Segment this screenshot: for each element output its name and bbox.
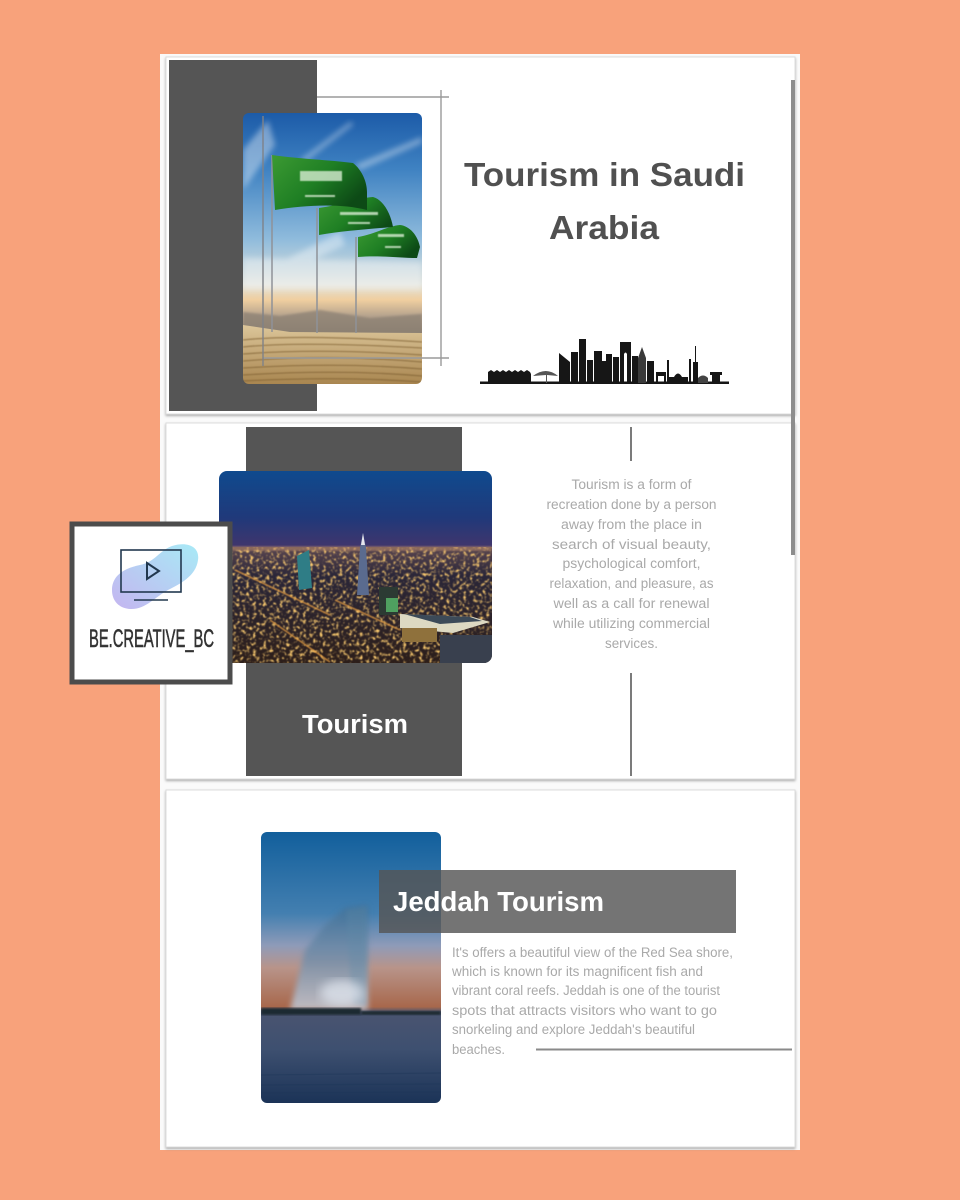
icon: Riyadh skyline silhouette — [480, 339, 729, 384]
definition text — [546, 477, 716, 651]
document sheet — [160, 54, 800, 1150]
scrollbar — [791, 80, 795, 555]
body text: beaches. — [452, 1042, 505, 1057]
photo: Riyadh at night — [219, 471, 492, 663]
tower and buildings — [357, 533, 369, 595]
accent line — [536, 1048, 792, 1050]
definition text: services. — [605, 636, 658, 651]
definition text: Tourism is a form of — [572, 477, 692, 492]
flag 3 — [358, 225, 420, 258]
panel: tourism definition slide — [166, 423, 795, 779]
definition text: relaxation, and pleasure, as — [550, 576, 714, 591]
body text — [451, 945, 733, 1057]
body text: vibrant coral reefs. Jeddah is one of the tourist — [452, 983, 720, 998]
flag 2 — [319, 197, 393, 235]
definition text: psychological comfort, — [562, 556, 700, 571]
body text: It's offers a beautiful view of the Red Sea shore, — [452, 945, 733, 960]
heading band — [379, 870, 736, 933]
flag 1 — [272, 155, 367, 210]
body text: spots that attracts visitors who want to go — [452, 1003, 717, 1018]
definition text: search of visual beauty, — [552, 537, 711, 552]
flag poles — [272, 155, 356, 333]
photo: Saudi flags over desert — [243, 113, 422, 384]
photo: King Fahd fountain — [261, 832, 441, 1103]
definition text: well as a call for renewal — [552, 596, 710, 611]
heading: Jeddah Tourism — [393, 886, 604, 917]
title — [464, 156, 745, 246]
body text: which is known for its magnificent fish and — [451, 964, 703, 979]
definition text: away from the place in — [561, 517, 702, 532]
definition text: recreation done by a person — [546, 497, 716, 512]
dark side block — [169, 60, 317, 411]
distant mountains — [243, 309, 422, 330]
definition text: while utilizing commercial — [552, 616, 710, 631]
panel: title slide — [166, 57, 795, 414]
divider lines — [630, 427, 632, 776]
dark vertical block — [246, 427, 462, 776]
title: Tourism in Saudi — [464, 156, 745, 193]
"Tourism" label: Tourism — [302, 711, 408, 739]
title: Arabia — [549, 209, 660, 246]
guide frame lines — [263, 90, 449, 366]
brand name: BE.CREATIVE_BC — [89, 625, 214, 653]
icon: video screen on blob — [112, 544, 198, 609]
logo badge: BE.CREATIVE_BC — [72, 524, 230, 682]
body text: snorkeling and explore Jeddah's beautiful — [452, 1022, 695, 1037]
panel: Jeddah tourism slide — [166, 790, 795, 1147]
